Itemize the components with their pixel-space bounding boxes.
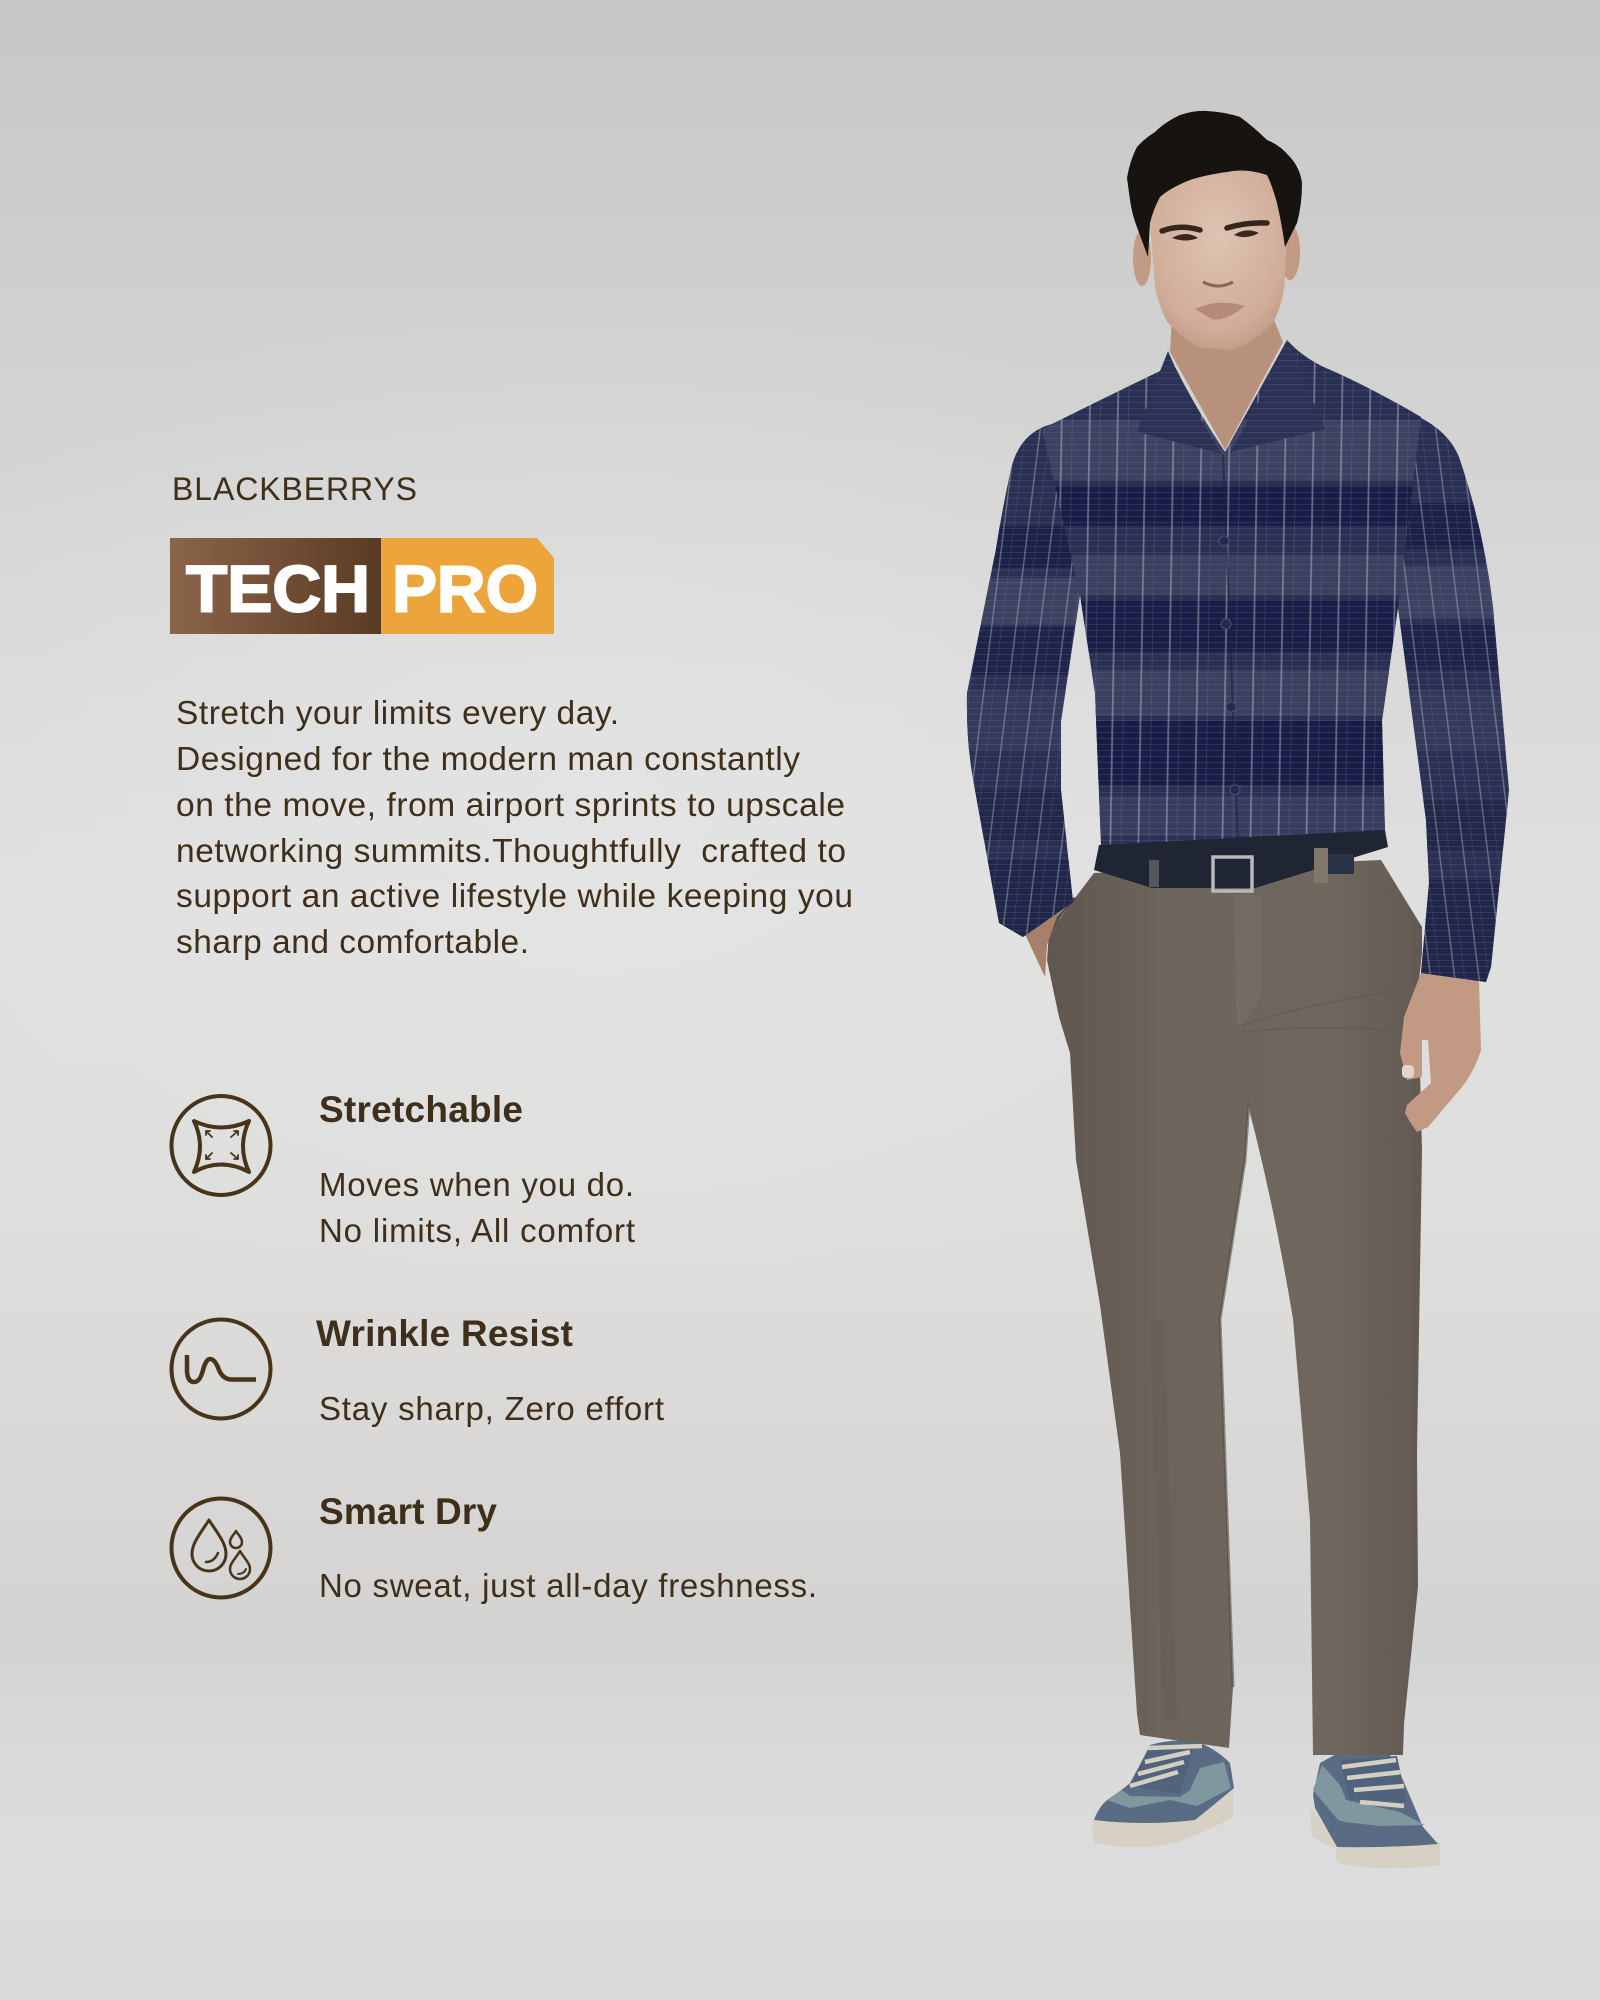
heading: smart dry: Smart Dry [319,1491,497,1532]
collar [1137,340,1325,454]
nose [1203,282,1233,286]
logo tech word: TECH [186,552,370,626]
intro paragraph: Designed for the modern man constantly [176,741,800,778]
feature: smart dry [172,1491,817,1604]
description: wrinkle resist: Stay sharp, Zero effort [319,1390,664,1427]
description: smart dry: No sweat, just all-day freshness. [319,1567,817,1604]
eyebrows [1162,223,1267,231]
eyes [1172,230,1259,240]
intro paragraph [176,695,853,961]
intro paragraph: support an active lifestyle while keeping you [176,878,853,915]
description: stretchable: Moves when you do. [319,1166,634,1203]
left sleeve [966,424,1080,937]
right shoe [1310,1752,1440,1868]
model figure [960,111,1515,1868]
shirt buttons [1219,536,1240,795]
heading: stretchable: Stretchable [319,1089,523,1130]
logo pro word: PRO [392,552,538,626]
intro paragraph: networking summits.Thoughtfully crafted to [176,833,846,870]
trousers [1047,860,1422,1755]
left shoe [1092,1741,1234,1847]
intro paragraph: sharp and comfortable. [176,924,529,961]
icon: wrinkle line [172,1320,270,1418]
feature: wrinkle resist [172,1313,664,1427]
lips [1195,303,1245,319]
face [1147,160,1288,350]
belt [1094,830,1388,891]
description: stretchable: No limits, All comfort [319,1212,635,1249]
shirt body [1040,340,1430,850]
hair [1127,111,1302,257]
heading: wrinkle resist: Wrinkle Resist [316,1313,573,1354]
brand name: BLACKBERRYS [172,471,417,507]
left hand in pocket [1016,900,1073,977]
right hand [1400,973,1481,1132]
icon: stretch [172,1096,270,1195]
neck [1170,315,1283,450]
feature: stretchable [172,1089,635,1249]
intro paragraph: on the move, from airport sprints to upscale [176,787,845,824]
icon: water drops [172,1498,270,1598]
description: stretchable [319,1166,635,1249]
logo pro panel [381,538,554,634]
right sleeve [1398,418,1509,982]
intro paragraph: Stretch your limits every day. [176,695,619,732]
TechPro logo [170,538,554,634]
ears [1133,224,1300,286]
logo tech panel [170,538,381,634]
